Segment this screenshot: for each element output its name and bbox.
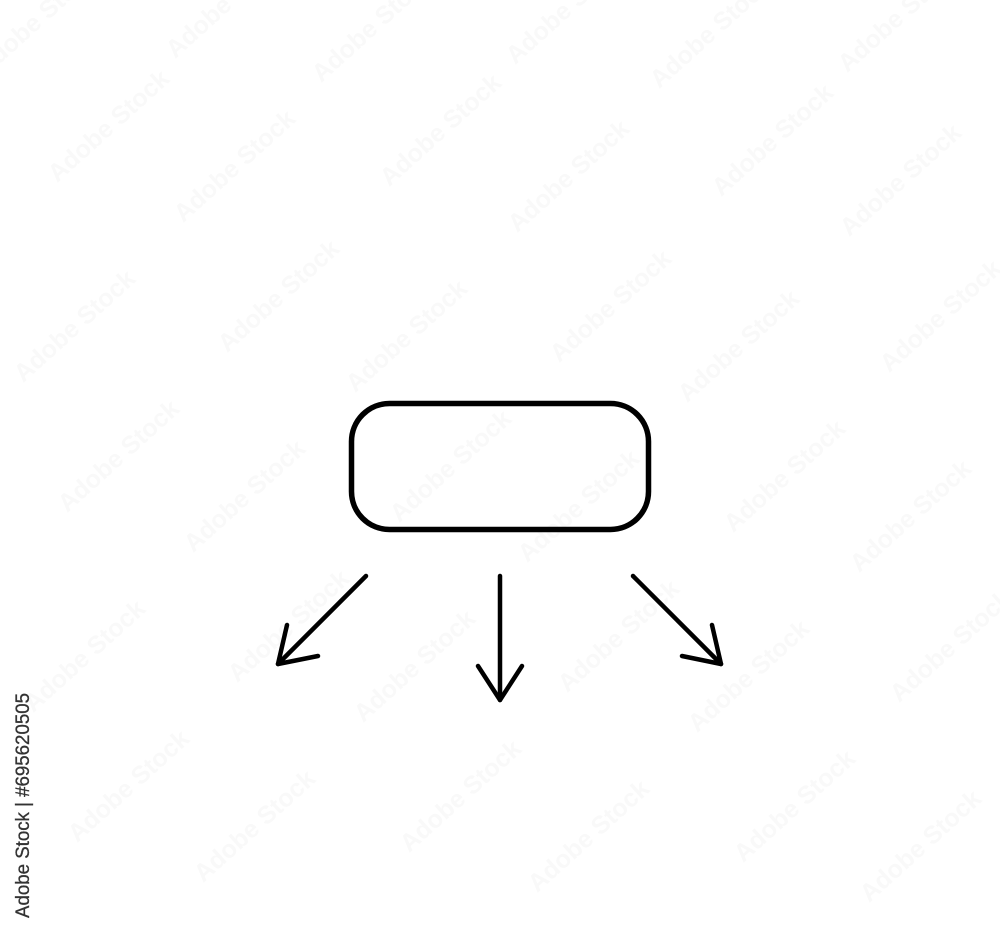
arrow: down-left [278, 576, 366, 664]
watermark pattern: Adobe Stock [9, 264, 141, 388]
stock id text: Adobe Stock | #695620505 [13, 693, 34, 918]
watermark pattern: Adobe Stock [375, 68, 507, 192]
watermark pattern: Adobe Stock [189, 764, 321, 888]
watermark pattern: Adobe Stock [63, 724, 195, 848]
watermark pattern: Adobe Stock [683, 614, 815, 738]
watermark pattern: Adobe Stock [179, 434, 311, 558]
watermark pattern: Adobe Stock [513, 444, 645, 568]
watermark pattern: Adobe Stock [223, 564, 355, 688]
rounded rectangle box [352, 404, 648, 530]
watermark pattern: Adobe Stock [213, 234, 345, 358]
arrow: straight down [478, 576, 522, 700]
watermark pattern: Adobe Stock [545, 244, 677, 368]
watermark pattern: Adobe Stock [53, 394, 185, 518]
watermark pattern: Adobe Stock [553, 574, 685, 698]
watermark pattern: Adobe Stock [19, 594, 151, 718]
watermark pattern: Adobe Stock [43, 64, 175, 188]
watermark pattern: Adobe Stock [719, 414, 851, 538]
watermark pattern: Adobe Stock [523, 774, 655, 898]
watermark pattern: Adobe Stock [707, 78, 839, 202]
watermark pattern: Adobe Stock [385, 404, 517, 528]
watermark pattern: Adobe Stock [395, 734, 527, 858]
arrow: down-right [633, 576, 721, 664]
watermark pattern: Adobe Stock [729, 744, 861, 868]
watermark pattern: Adobe Stock [341, 274, 473, 398]
watermark pattern: Adobe Stock [503, 114, 635, 238]
watermark pattern: Adobe Stock [845, 454, 977, 578]
watermark pattern: Adobe Stock [673, 284, 805, 408]
watermark pattern: Adobe Stock [855, 784, 987, 908]
watermark pattern: Adobe Stock [349, 604, 481, 728]
watermark pattern: Adobe Stock [835, 118, 967, 242]
watermark pattern: Adobe Stock [169, 104, 301, 228]
